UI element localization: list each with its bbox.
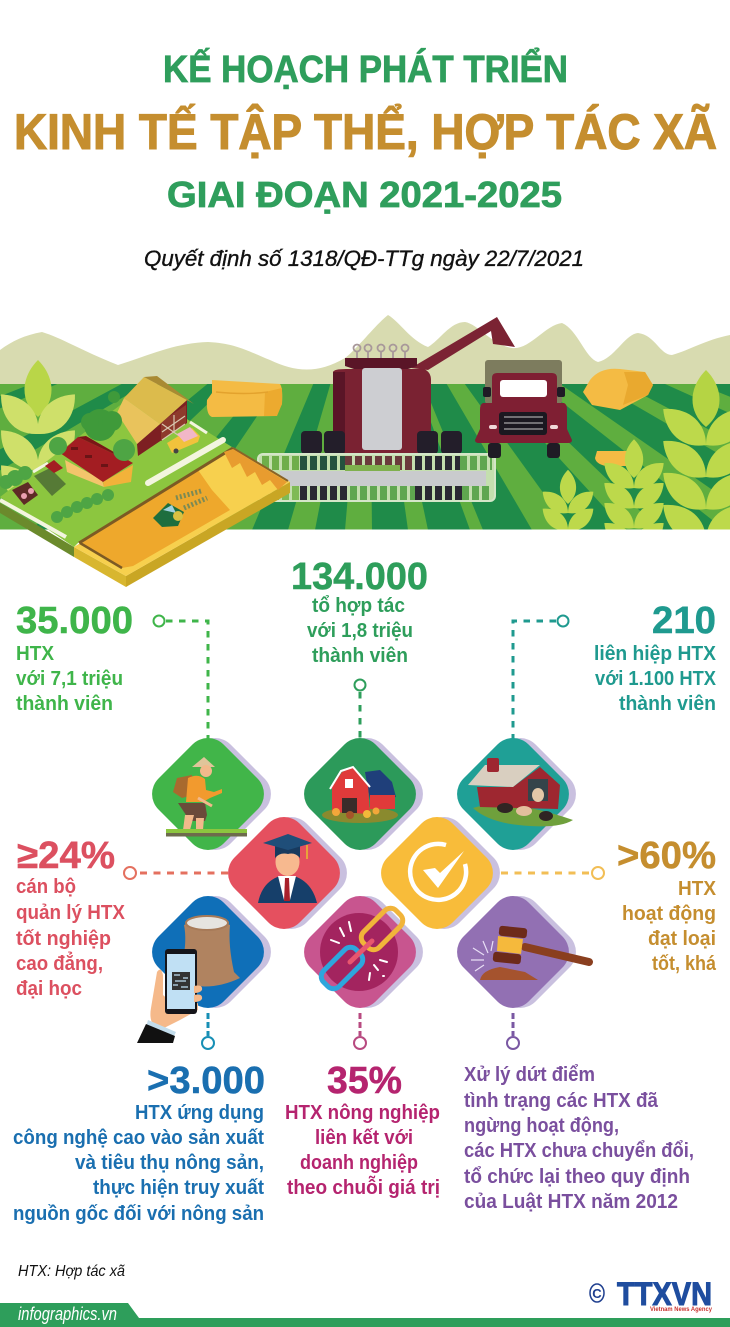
icon: check diamond bbox=[372, 808, 509, 938]
stat: 24 percent: quản lý HTX bbox=[16, 901, 125, 924]
stat: 60 percent: tốt, khá bbox=[652, 952, 717, 975]
icon: barn diamond bbox=[295, 729, 432, 859]
farmhouse bbox=[60, 436, 133, 487]
connector: 3.000 bbox=[202, 1013, 214, 1049]
icon: livestock barn diamond bbox=[448, 729, 585, 859]
stat: 24 percent: đại học bbox=[16, 977, 82, 1000]
stat: 35 percent: HTX nông nghiệp bbox=[285, 1101, 440, 1124]
stat: 210: thành viên bbox=[619, 692, 716, 715]
stat: 24 percent: ≥24% bbox=[17, 835, 115, 877]
connector: 35.000 bbox=[154, 616, 208, 740]
subtitle: decision reference: Quyết định số 1318/QĐ-TTg ngày 22/7/2021 bbox=[144, 246, 584, 271]
stat: 3.000: thực hiện truy xuất bbox=[93, 1176, 264, 1199]
stat: 134.000: thành viên bbox=[312, 644, 408, 667]
stat: 35 percent: liên kết với bbox=[315, 1126, 413, 1149]
connector: 60 percent bbox=[501, 867, 604, 879]
stat: 3.000: và tiêu thụ nông sản, bbox=[75, 1151, 264, 1174]
stat: 60 percent: HTX bbox=[678, 877, 716, 900]
stat: 35.000 HTX: 35.000 bbox=[16, 600, 133, 642]
text block: dissolve inactive cooperatives: Xử lý dứt điểm bbox=[464, 1063, 595, 1086]
stat: 35.000 HTX: thành viên bbox=[16, 692, 113, 715]
stat: 3.000: HTX ứng dụng bbox=[135, 1101, 264, 1124]
stat: 35 percent bbox=[285, 1060, 440, 1199]
stat: 60 percent bbox=[617, 835, 717, 975]
connector: 35 percent bbox=[354, 1013, 366, 1049]
title bbox=[14, 46, 717, 215]
footer bar with site name bbox=[0, 1303, 730, 1327]
mountains bbox=[0, 315, 730, 385]
harvester arm bbox=[411, 317, 515, 370]
stat: 210 bbox=[594, 600, 716, 715]
hay bale small bbox=[595, 451, 628, 466]
stat: 60 percent: hoạt động bbox=[622, 902, 716, 925]
yellow pickup bbox=[167, 427, 200, 454]
connector: 134.000 bbox=[354, 680, 366, 740]
small tractor bbox=[153, 491, 207, 527]
stat: 35 percent: doanh nghiệp bbox=[300, 1151, 418, 1174]
stat: 60 percent: đạt loại bbox=[648, 927, 716, 950]
footer bar with site name: infographics.vn bbox=[18, 1304, 117, 1324]
text block: dissolve inactive cooperatives: các HTX chưa chuyển đổi, bbox=[464, 1139, 694, 1162]
stat: 3.000: nguồn gốc đối với nông sản bbox=[13, 1202, 264, 1225]
note: abbreviation: HTX: Hợp tác xã bbox=[18, 1263, 125, 1280]
stat: 24 percent bbox=[16, 835, 125, 1000]
stat: 3.000 bbox=[13, 1060, 265, 1225]
icon: graduate diamond bbox=[219, 808, 356, 938]
trees bbox=[81, 391, 122, 441]
hay bale left bbox=[207, 380, 282, 417]
stat: 3.000: >3.000 bbox=[147, 1060, 265, 1102]
stat: 210: liên hiệp HTX bbox=[594, 642, 716, 665]
stat: 35.000 HTX: với 7,1 triệu bbox=[16, 667, 123, 690]
connector: dissolve bbox=[507, 1013, 519, 1049]
connector: 24 percent bbox=[124, 867, 229, 879]
text block: dissolve inactive cooperatives: tổ chức lại theo quy định bbox=[464, 1165, 690, 1188]
stat: 134.000: 134.000 bbox=[291, 556, 428, 598]
isometric farm plot bbox=[0, 376, 290, 587]
harvester header bbox=[258, 454, 495, 501]
icon: gavel diamond bbox=[448, 887, 589, 1017]
text block: dissolve inactive cooperatives: của Luật HTX năm 2012 bbox=[464, 1190, 678, 1213]
truck bbox=[475, 360, 572, 458]
logo: TTXVN: Vietnam News Agency bbox=[650, 1306, 712, 1313]
icon: farmer diamond bbox=[143, 729, 280, 859]
plot shed and soil bbox=[12, 460, 66, 505]
text block: dissolve inactive cooperatives: ngừng hoạt động, bbox=[464, 1114, 619, 1137]
barn bbox=[117, 376, 194, 456]
stat: 35 percent: 35% bbox=[327, 1060, 402, 1102]
logo: TTXVN: C bbox=[592, 1286, 602, 1301]
wheat: left bbox=[1, 360, 75, 491]
stat: 24 percent: tốt nghiệp bbox=[16, 927, 111, 950]
title: GIAI ĐOẠN 2021-2025 bbox=[167, 174, 562, 215]
connector: 210 bbox=[513, 616, 568, 740]
icon: chain link diamond bbox=[295, 887, 432, 1017]
hay bale right bbox=[583, 369, 653, 410]
stat: 3.000: công nghệ cao vào sản xuất bbox=[13, 1126, 264, 1149]
orchard rows bbox=[0, 437, 135, 523]
stat: 24 percent: cao đẳng, bbox=[16, 951, 103, 975]
text block: dissolve inactive cooperatives: tình trạng các HTX đã bbox=[464, 1089, 659, 1112]
stat: 35 percent: theo chuỗi giá trị bbox=[287, 1175, 440, 1199]
icon: rice sack and phone diamond bbox=[137, 887, 280, 1043]
stat: 35.000 HTX: HTX bbox=[16, 642, 54, 665]
stat: 35.000 HTX bbox=[16, 600, 133, 715]
stat: 134.000: tổ hợp tác bbox=[312, 594, 405, 617]
illustration: farm landscape bbox=[0, 315, 730, 587]
wheat: right group bbox=[542, 370, 730, 530]
title: KẾ HOẠCH PHÁT TRIỂN bbox=[163, 46, 568, 91]
text block: dissolve inactive cooperatives bbox=[464, 1063, 694, 1213]
harvester body bbox=[301, 344, 462, 458]
logo: TTXVN: TTXVN bbox=[617, 1276, 712, 1312]
stat: 60 percent: >60% bbox=[617, 835, 716, 877]
stat: 134.000: với 1,8 triệu bbox=[307, 619, 413, 642]
stat: 210: với 1.100 HTX bbox=[595, 667, 716, 690]
stat: 134.000 bbox=[291, 556, 428, 667]
field with perspective stripes bbox=[0, 384, 730, 530]
stat: 210: 210 bbox=[652, 600, 716, 642]
stat: 24 percent: cán bộ bbox=[16, 875, 76, 898]
